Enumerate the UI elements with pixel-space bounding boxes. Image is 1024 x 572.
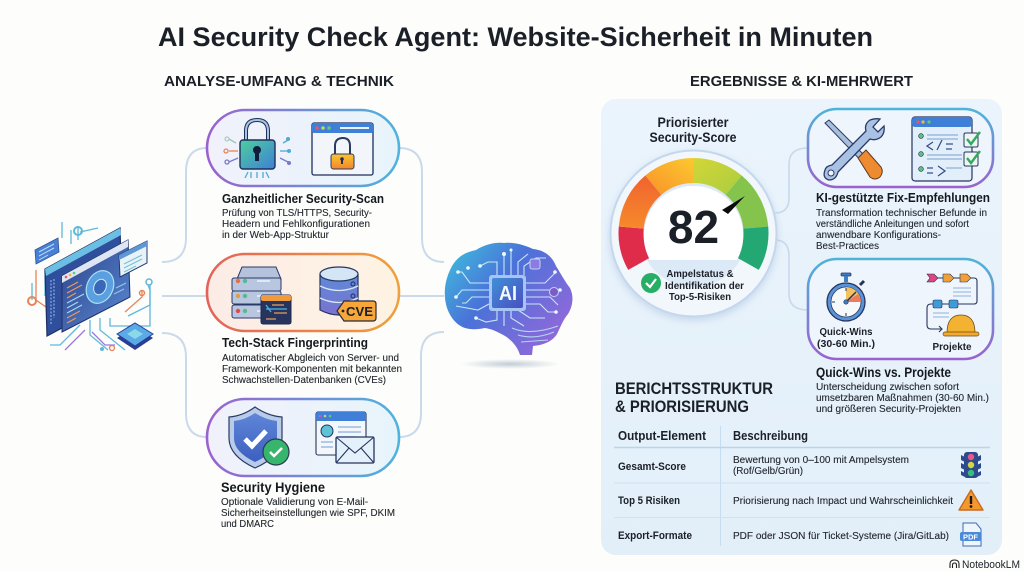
gauge: security score 82: [610, 150, 776, 316]
front window: [62, 240, 130, 332]
shield orb: [81, 266, 119, 308]
table header: Output-Element: [618, 429, 707, 443]
label: Quick-Wins: [817, 326, 875, 350]
gauge caption: Identifikation der: [665, 280, 744, 292]
icon: traffic light: [961, 452, 981, 478]
card description: [221, 496, 395, 530]
gauge needle: [722, 196, 745, 214]
side window: [119, 241, 147, 277]
card description: [816, 381, 989, 415]
icon: PDF document: [960, 523, 981, 546]
label: Projekte: Projekte: [932, 341, 972, 353]
gauge caption: Ampelstatus &: [666, 268, 734, 280]
heading: report structure: BERICHTSSTRUKTUR: [615, 379, 773, 398]
connector lines: left flow: [162, 148, 444, 437]
gauge heading: Security-Score: [650, 130, 737, 145]
card description: Transformation technischer Befunde in: [816, 207, 987, 219]
gauge caption: [665, 268, 744, 303]
card frame: [808, 109, 993, 187]
table: report outputs: [614, 426, 990, 546]
heading: left section: ANALYSE-UMFANG & TECHNIK: [164, 73, 394, 90]
icon: project flow and helmet: [927, 274, 979, 336]
connector lines: gauge to cards: [775, 148, 808, 310]
gauge caption: Top-5-Risiken: [669, 291, 731, 303]
icon: code checklist: [912, 117, 980, 181]
icon: database with CVE tag: [320, 267, 376, 321]
card description: Automatischer Abgleich von Server- und: [222, 352, 399, 364]
illustration: website code windows: [28, 222, 153, 351]
card: Ganzheitlicher Security-Scan: [207, 110, 399, 241]
icon: browser with lock: [312, 123, 373, 175]
card description: und größeren Security-Projekten: [816, 403, 961, 415]
icon: crossed tools: [824, 119, 884, 180]
icon: stopwatch: [827, 273, 865, 321]
row: Gesamt-Score: (Rof/Gelb/Grün): [733, 465, 803, 477]
heading: report structure: [615, 379, 773, 416]
icon: PDF document: PDF: [963, 532, 978, 542]
row: Top 5 Risiken: Top 5 Risiken: [618, 495, 680, 507]
icon: green check: [641, 273, 661, 293]
icon: database with CVE tag: CVE: [346, 304, 373, 319]
icon: circuit padlock: [224, 120, 291, 178]
card frame: [808, 259, 993, 359]
row: Gesamt-Score: Gesamt-Score: [618, 461, 686, 473]
heading: right section: ERGEBNISSE & KI-MEHRWERT: [690, 73, 913, 90]
card title: Security Hygiene: [221, 479, 325, 495]
pill frame: [207, 110, 399, 186]
row: Export-Formate: Export-Formate: [618, 530, 692, 542]
table header: [618, 429, 808, 443]
card description: Prüfung von TLS/HTTPS, Security-: [222, 207, 372, 219]
card title: Ganzheitlicher Security-Scan: [222, 191, 384, 206]
row: Gesamt-Score: Bewertung von 0–100 mit Ampelsystem: [733, 454, 909, 466]
gauge segments: [619, 158, 768, 270]
card description: Schwachstellen-Datenbanken (CVEs): [222, 374, 386, 386]
card description: umsetzbaren Maßnahmen (30-60 Min.): [816, 392, 989, 404]
back window: [45, 228, 122, 336]
heading: report structure: & PRIORISIERUNG: [615, 397, 749, 416]
score value: 82: [668, 201, 719, 253]
icon: browser with envelope: [316, 412, 374, 463]
icon: AI brain: AI: [499, 283, 517, 305]
card description: [816, 207, 987, 252]
small card: [35, 238, 59, 264]
icon: server rack: [232, 267, 291, 324]
chip: [117, 326, 153, 350]
icon: AI brain: [445, 243, 572, 369]
card description: [222, 352, 402, 386]
row: Export-Formate: [618, 530, 949, 542]
card: Security Hygiene: [207, 399, 399, 530]
code lines: [51, 279, 126, 325]
card description: Headern und Fehlkonfigurationen: [222, 218, 370, 230]
card: KI-gestuetzte Fix-Empfehlungen: [808, 109, 993, 252]
card title: KI-gestützte Fix-Empfehlungen: [816, 190, 990, 205]
label: Quick-Wins: Quick-Wins: [820, 326, 873, 338]
card description: in der Web-App-Struktur: [222, 229, 329, 241]
card description: Framework-Komponenten mit bekannten: [222, 363, 402, 375]
card description: Optionale Validierung von E-Mail-: [221, 496, 368, 508]
card: Quick-Wins vs. Projekte: [808, 259, 993, 415]
card description: und DMARC: [221, 518, 274, 530]
icon: warning triangle: [959, 490, 983, 510]
row: Top 5 Risiken: Priorisierung nach Impact und Wahrscheinlichkeit: [733, 495, 953, 507]
card description: Unterscheidung zwischen sofort: [816, 381, 959, 393]
card title: Quick-Wins vs. Projekte: [816, 364, 951, 380]
row: Top 5 Risiken: [618, 495, 953, 507]
label: Quick-Wins: (30-60 Min.): [817, 338, 875, 350]
card description: [222, 207, 372, 241]
card description: Best-Practices: [816, 240, 879, 252]
title: AI Security Check Agent: Website-Sicherheit in Minuten: [158, 22, 873, 52]
row: Export-Formate: PDF oder JSON für Ticket-Systeme (Jira/GitLab): [733, 530, 949, 542]
card title: Tech-Stack Fingerprinting: [222, 335, 368, 350]
gauge heading: [650, 115, 737, 145]
gauge heading: Priorisierter: [658, 115, 729, 130]
card description: Sicherheitseinstellungen wie SPF, DKIM: [221, 507, 395, 519]
row: Gesamt-Score: [618, 454, 909, 477]
footer: NotebookLM mark: NotebookLM: [962, 559, 1020, 571]
pill frame: [207, 399, 399, 476]
card description: anwendbare Konfigurations-: [816, 229, 941, 241]
icon: shield with check: [229, 407, 289, 468]
table header: Beschreibung: [733, 429, 808, 443]
pill frame: [207, 254, 399, 331]
card: Tech-Stack Fingerprinting: [207, 254, 402, 386]
panel: results and AI value: [601, 99, 1002, 555]
card description: verständliche Anleitungen und sofort: [816, 218, 969, 230]
